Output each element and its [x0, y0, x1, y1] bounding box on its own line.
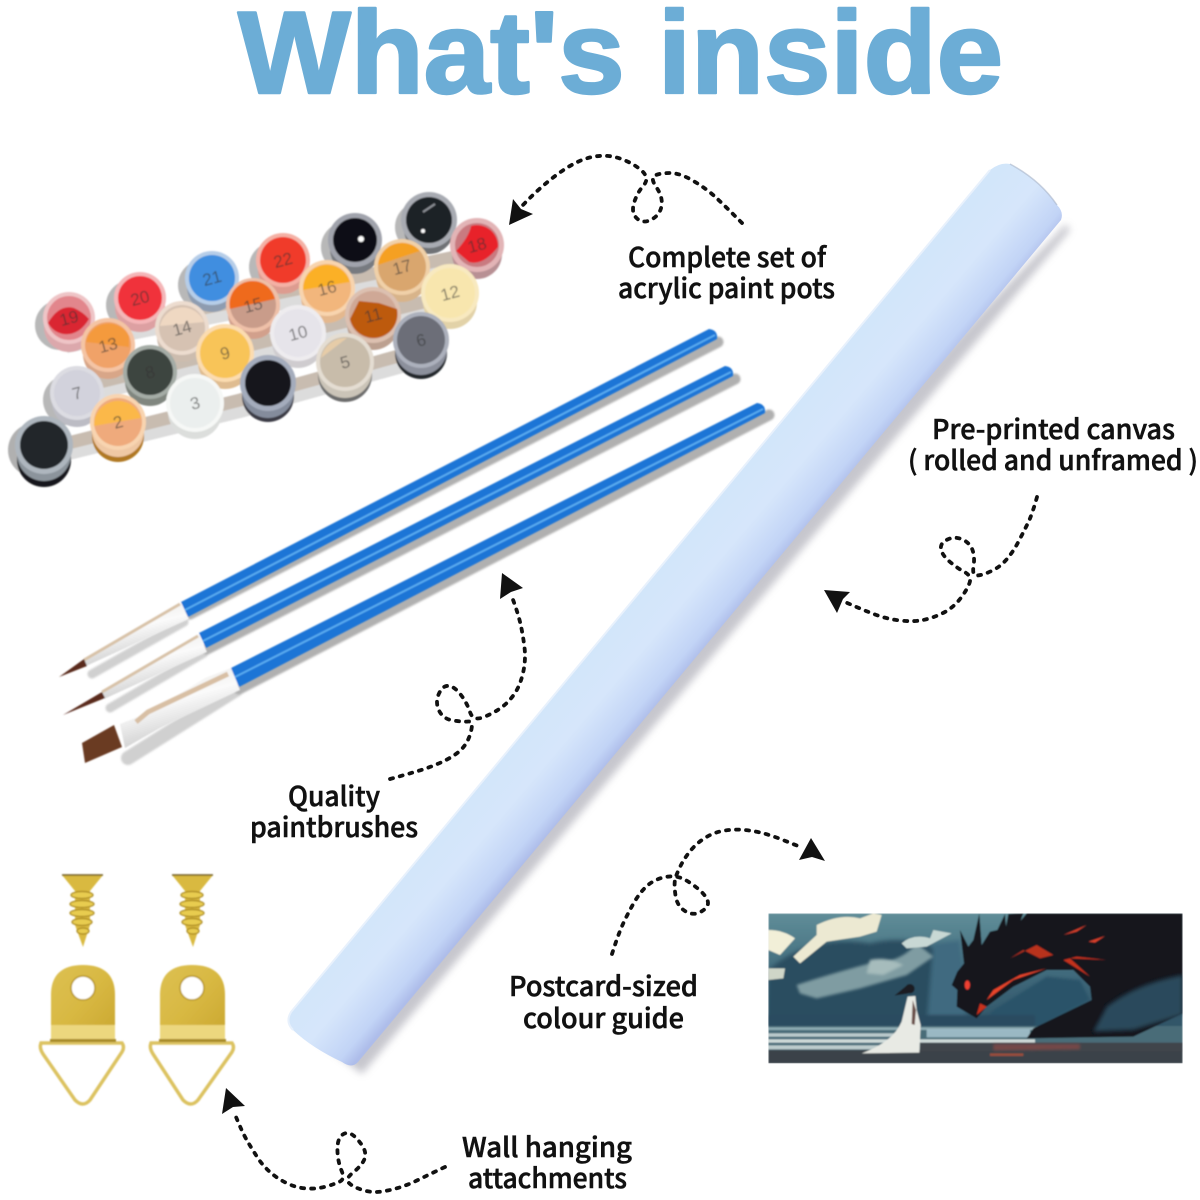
pot 17: 17 [391, 256, 414, 279]
arrow: colour guide [612, 830, 825, 954]
pot 8: 8 [143, 362, 157, 383]
tray strips [36, 252, 484, 460]
pot 21 [178, 251, 239, 312]
pot 4 [240, 355, 296, 422]
colour guide: dragon painting [768, 913, 1183, 1063]
label: canvas: Pre-printed canvas [932, 408, 1175, 447]
screw left [62, 875, 103, 947]
pot 2 [90, 394, 146, 462]
pot 5: 5 [338, 352, 352, 373]
under-neck sky [992, 976, 1089, 1017]
pot 13: 13 [97, 334, 120, 357]
label: colour guide: Postcard-sized [509, 965, 698, 1004]
arrow: canvas [824, 497, 1037, 621]
label: colour guide [509, 965, 698, 1036]
pot 10: 10 [287, 322, 310, 345]
pot 16 [299, 260, 355, 323]
pot 17 [374, 239, 430, 302]
pot 2: 2 [111, 412, 125, 433]
label: canvas: ( rolled and unframed ) [908, 439, 1198, 478]
screw right [172, 875, 213, 947]
label: paintbrushes: paintbrushes [250, 806, 418, 845]
label: paint pots: acrylic paint pots [618, 267, 835, 306]
pot 11 [345, 287, 401, 350]
pot 9 [196, 324, 254, 389]
pot 6: 6 [414, 330, 428, 351]
illustration: paintbrushes [59, 329, 769, 763]
pot 6 [393, 312, 449, 379]
pot 20: 20 [129, 287, 152, 310]
pot 12: 12 [439, 282, 462, 305]
pot 3: 3 [188, 393, 202, 414]
pot 8 [123, 345, 177, 406]
brush 1 [59, 329, 717, 677]
pot 7 [43, 366, 104, 427]
label: canvas [908, 408, 1198, 478]
label: wall hanging attachments [462, 1126, 632, 1196]
label: wall hanging attachments: attachments [468, 1157, 627, 1196]
brush 3 [82, 403, 765, 763]
pot 18 [450, 218, 504, 279]
pot dark [395, 192, 457, 254]
illustration: acrylic paint pots [8, 192, 504, 487]
pot 20 [106, 272, 166, 332]
illustration: rolled canvas tube [288, 164, 1070, 1074]
pot 21: 21 [201, 267, 224, 290]
pot 14: 14 [171, 317, 194, 340]
label: colour guide: colour guide [523, 997, 684, 1036]
pot 22: 22 [272, 249, 295, 272]
pot 15: 15 [242, 294, 265, 317]
pot 14 [155, 301, 209, 362]
pot 1 [8, 416, 73, 487]
horizon haze [768, 1015, 1035, 1026]
hanger left [40, 965, 124, 1104]
beach [768, 1043, 1183, 1063]
brush 2 [63, 366, 733, 715]
label: paint pots [618, 236, 835, 306]
pot 19: 19 [58, 307, 81, 330]
pot 10 [270, 305, 326, 368]
sea [768, 1026, 1183, 1051]
label: paintbrushes: Quality [288, 775, 380, 814]
storm clouds [768, 913, 967, 1027]
pot 12 [421, 264, 479, 329]
woman in white dress [862, 984, 921, 1053]
illustration: wall hanging hardware [40, 875, 234, 1104]
label: paintbrushes [250, 775, 418, 845]
pot 18: 18 [466, 234, 489, 257]
arrow: paintbrushes [390, 573, 525, 779]
pot 7: 7 [70, 383, 84, 404]
pot 19 [35, 292, 95, 352]
arrow: wall hanging attachments [222, 1088, 445, 1192]
pot 9: 9 [218, 343, 232, 364]
pot 3 [166, 374, 224, 439]
pot 13 [81, 318, 135, 379]
pot black [321, 213, 382, 274]
dragon [952, 913, 1183, 1038]
hanger right [150, 965, 234, 1104]
pot 11: 11 [362, 304, 384, 327]
label: wall hanging attachments: Wall hanging [462, 1126, 632, 1165]
label: paint pots: Complete set of [628, 236, 828, 275]
pot 5 [316, 333, 374, 402]
pot 16: 16 [316, 277, 339, 300]
brush shadows [92, 342, 769, 758]
pot 15 [226, 278, 280, 339]
pot 22 [249, 233, 310, 294]
arrow: paint pots [509, 156, 742, 225]
